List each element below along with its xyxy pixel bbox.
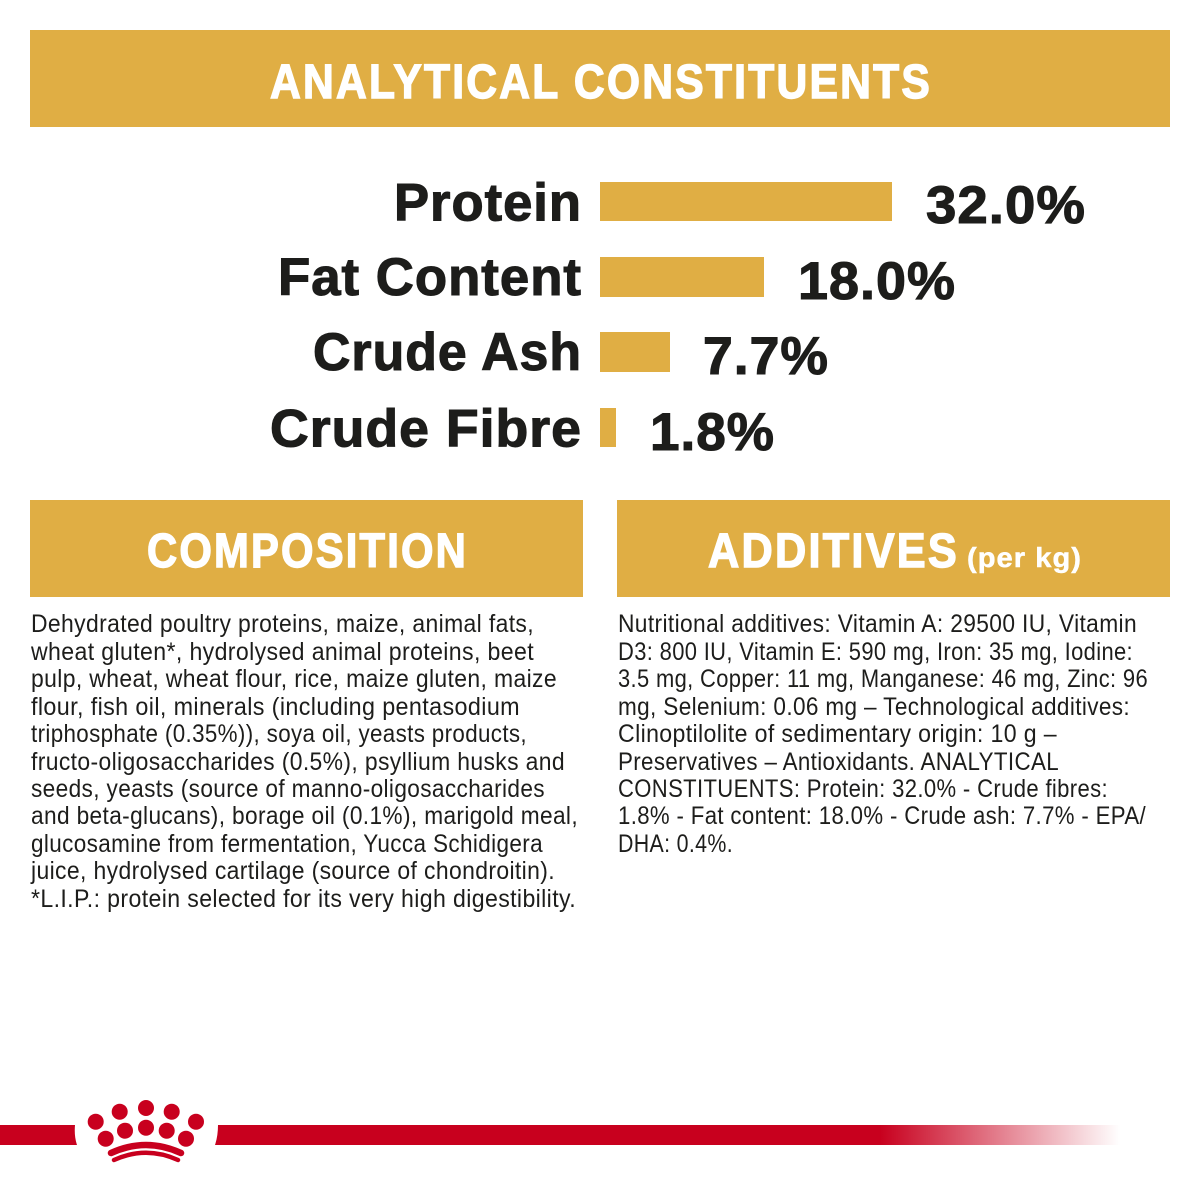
composition text — [30, 610, 578, 913]
row: protein: Protein — [394, 174, 582, 232]
row: crude fibre: 1.8% — [650, 403, 775, 462]
additives text: DHA: 0.4%. — [618, 830, 733, 858]
row: fat content: Fat Content — [278, 248, 582, 307]
row: fat content — [278, 248, 956, 311]
composition text: Dehydrated poultry proteins, maize, animal fats, — [31, 610, 534, 638]
additives text: 1.8% - Fat content: 18.0% - Crude ash: 7.7% - EPA/ — [618, 802, 1146, 830]
composition text: wheat gluten*, hydrolysed animal proteins, beet — [30, 638, 534, 666]
icon: royal canin crown logo — [88, 1100, 204, 1160]
row: protein — [394, 174, 1086, 235]
composition text: juice, hydrolysed cartilage (source of chondroitin). — [30, 857, 555, 885]
additives heading — [617, 500, 1170, 597]
row: crude fibre: Crude Fibre — [270, 400, 582, 458]
additives text: CONSTITUENTS: Protein: 32.0% - Crude fibres: — [618, 775, 1108, 803]
footer red band — [0, 1125, 1120, 1145]
row: protein: 32.0% — [926, 176, 1086, 235]
additives heading: ADDITIVES — [708, 525, 959, 578]
additives text: Clinoptilolite of sedimentary origin: 10 g – — [618, 720, 1057, 748]
additives text: Preservatives – Antioxidants. ANALYTICAL — [618, 748, 1059, 776]
bar chart: analytical constituents — [270, 174, 1086, 462]
row: crude ash: 7.7% — [703, 327, 829, 386]
title banner: ANALYTICAL CONSTITUENTS — [270, 56, 932, 109]
additives heading: (per kg) — [967, 542, 1082, 573]
row: crude ash — [313, 323, 829, 386]
composition text: *L.I.P.: protein selected for its very high digestibility. — [31, 885, 576, 913]
row: crude fibre — [270, 400, 775, 462]
composition heading — [30, 500, 583, 597]
composition heading: COMPOSITION — [147, 525, 468, 578]
composition text: triphosphate (0.35%)), soya oil, yeasts products, — [31, 720, 527, 748]
composition text: and beta-glucans), borage oil (0.1%), marigold meal, — [31, 802, 578, 830]
title banner — [30, 30, 1170, 127]
composition text: flour, fish oil, minerals (including pentasodium — [31, 693, 520, 721]
additives text: Nutritional additives: Vitamin A: 29500 IU, Vitamin — [618, 610, 1137, 638]
additives text — [618, 610, 1148, 858]
additives text: mg, Selenium: 0.06 mg – Technological additives: — [618, 693, 1130, 721]
composition text: glucosamine from fermentation, Yucca Schidigera — [31, 830, 543, 858]
additives text: D3: 800 IU, Vitamin E: 590 mg, Iron: 35 mg, Iodine: — [618, 638, 1133, 666]
row: fat content: 18.0% — [798, 252, 956, 311]
composition text: fructo-oligosaccharides (0.5%), psyllium husks and — [31, 748, 565, 776]
composition text: pulp, wheat, wheat flour, rice, maize gluten, maize — [31, 665, 557, 693]
composition text: seeds, yeasts (source of manno-oligosaccharides — [31, 775, 545, 803]
row: crude ash: Crude Ash — [313, 323, 582, 382]
